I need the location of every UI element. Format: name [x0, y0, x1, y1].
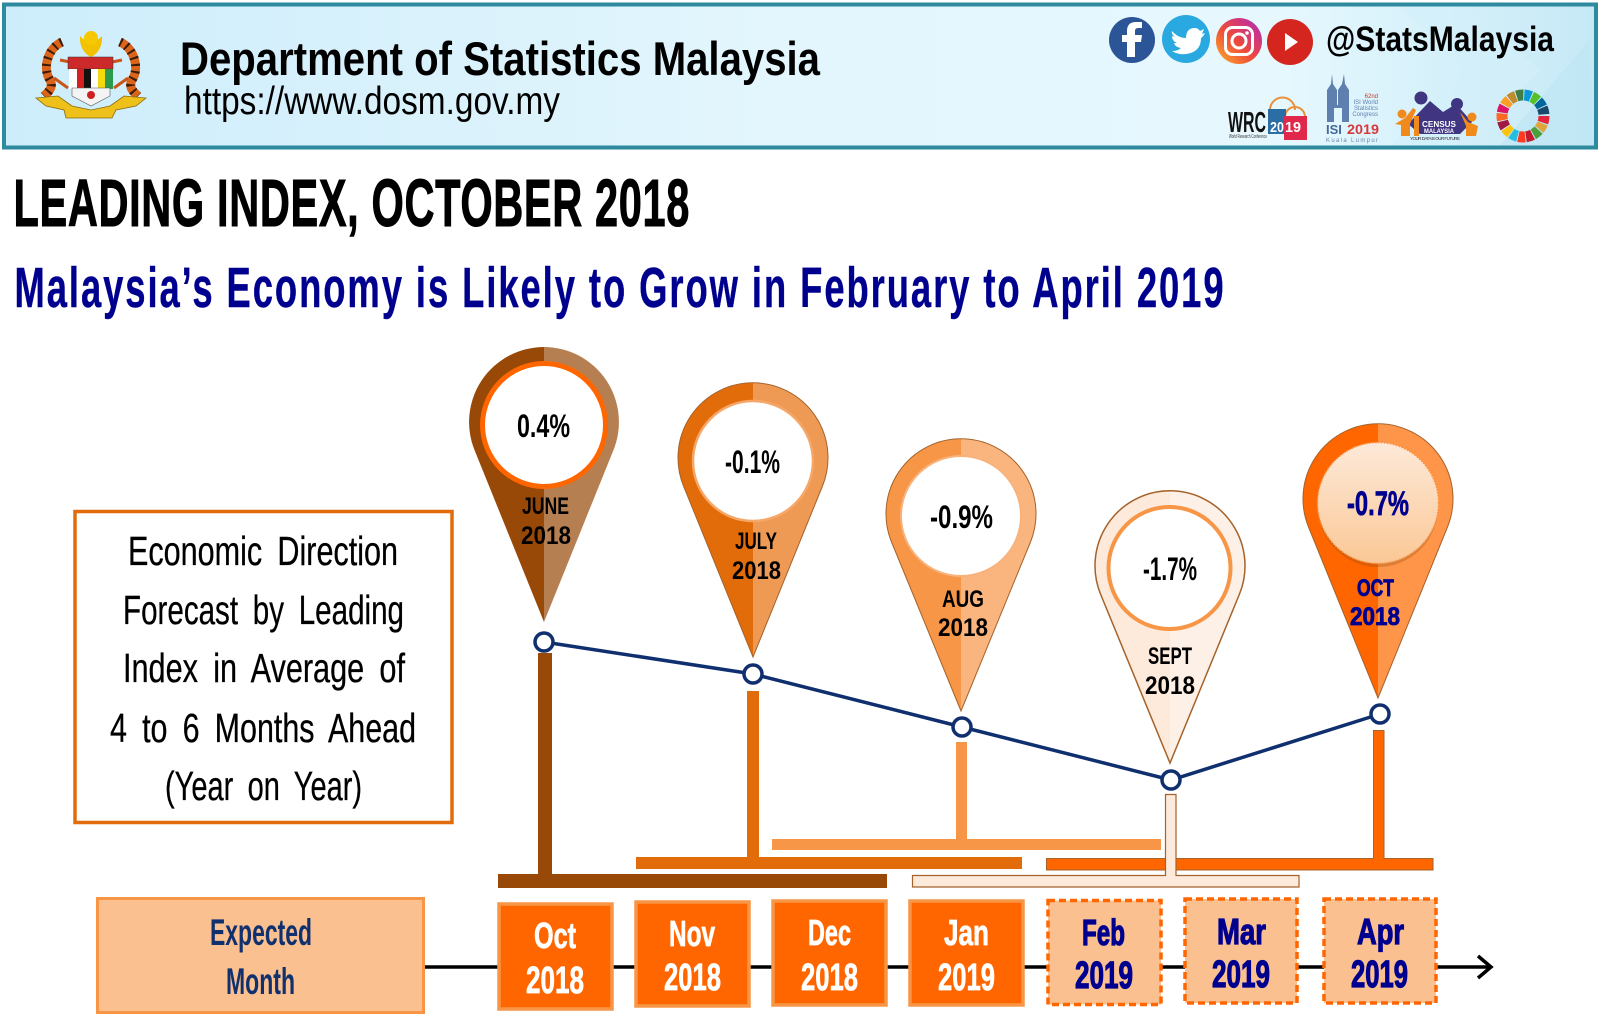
pin: September 2018 -1.7%: -1.7% [1143, 551, 1197, 587]
month box: Dec 2018 [773, 901, 886, 1005]
logo: ISI 2019 congress: Statistics [1354, 106, 1378, 112]
month box: Apr 2019 forecast: Apr [1357, 911, 1404, 952]
logo: ISI 2019 congress: Kuala Lumpur [1326, 138, 1378, 144]
month box: Oct 2018: Oct [534, 915, 576, 956]
logo: ISI 2019 congress: 62nd [1365, 94, 1378, 100]
logo: ISI 2019 congress [1326, 74, 1379, 144]
label: expected month [98, 898, 424, 1012]
panel: economic direction description: Index in Average of [123, 645, 405, 691]
pin: August 2018 -0.9% [886, 439, 1036, 711]
month box: Oct 2018: 2018 [526, 960, 584, 1002]
panel: economic direction description: Economic Direction [128, 528, 398, 574]
month box: Apr 2019 forecast: 2019 [1351, 954, 1408, 996]
label: expected month: Expected [210, 912, 312, 953]
panel: economic direction description: (Year on Year) [165, 763, 362, 809]
month box: Feb 2019 forecast: 2019 [1075, 955, 1133, 997]
logo: ISI 2019 congress: ISI [1326, 122, 1342, 137]
logo: census 2020: YOUR DATA IS OUR FUTURE [1410, 136, 1460, 141]
logo: WRC 2019: WRC [1228, 107, 1266, 139]
logo: WRC 2019: 19 [1285, 119, 1301, 136]
pin: October 2018 -0.7% [1303, 424, 1453, 698]
pin: August 2018 -0.9%: 2018 [938, 614, 988, 642]
pin: June 2018 0.4%: JUNE [522, 493, 569, 520]
pin: October 2018 -0.7%: -0.7% [1347, 485, 1409, 523]
logo: ISI 2019 congress: ISI World [1353, 100, 1378, 106]
logo: WRC 2019: World Research Conference [1229, 134, 1267, 140]
month box: Mar 2019 forecast: Mar [1217, 911, 1266, 952]
logo: WRC 2019: 20 [1270, 119, 1284, 136]
pin: July 2018 -0.1%: -0.1% [725, 444, 780, 480]
text: website address: https://www.dosm.gov.my [184, 80, 560, 123]
pin: June 2018 0.4%: 0.4% [517, 408, 570, 444]
icon: twitter [1162, 15, 1210, 63]
logo: ISI 2019 congress: Congress [1352, 112, 1378, 118]
pin: October 2018 -0.7%: 2018 [1350, 603, 1400, 631]
month box: Nov 2018: Nov [669, 913, 715, 954]
pin: October 2018 -0.7%: OCT [1357, 575, 1394, 602]
stem and bracket: July [636, 691, 1022, 869]
title: LEADING INDEX, OCTOBER 2018 [14, 166, 690, 241]
month box: Oct 2018 [499, 904, 612, 1009]
pin: August 2018 -0.9%: -0.9% [930, 499, 993, 535]
month box: Dec 2018: Dec [808, 912, 851, 953]
pin: July 2018 -0.1%: JULY [735, 528, 777, 555]
month box: Nov 2018: 2018 [664, 957, 721, 999]
pin: June 2018 0.4% [469, 347, 619, 622]
icon: facebook [1109, 17, 1155, 63]
stem and bracket: June [498, 653, 887, 888]
pin: August 2018 -0.9%: AUG [942, 586, 984, 613]
stem and bracket: September [912, 794, 1299, 887]
icon: instagram [1216, 18, 1262, 64]
month box: Feb 2019 forecast: Feb [1082, 912, 1125, 953]
pin: September 2018 -1.7%: SEPT [1148, 643, 1192, 670]
logo: census 2020: MALAYSIA [1424, 129, 1455, 135]
pin: September 2018 -1.7%: 2018 [1145, 672, 1195, 700]
month box: Dec 2018: 2018 [801, 957, 858, 999]
month box: Jan 2019: 2019 [938, 957, 995, 999]
panel: economic direction description: 4 to 6 Months Ahead [110, 705, 416, 751]
month box: Jan 2019: Jan [944, 912, 989, 953]
timeline arrow [425, 956, 1491, 978]
panel: economic direction description [75, 512, 452, 822]
icon: Malaysia coat of arms [36, 31, 146, 118]
icon: youtube [1267, 19, 1313, 65]
header banner [4, 4, 1596, 148]
pin: June 2018 0.4%: 2018 [521, 522, 571, 550]
logo: ISI 2019 congress: 2019 [1347, 121, 1379, 137]
logo: census 2020 [1395, 92, 1478, 141]
month box: Feb 2019 forecast [1048, 900, 1161, 1004]
month box: Nov 2018 [636, 902, 749, 1006]
month box: Mar 2019 forecast: 2019 [1212, 954, 1270, 996]
heading: department name: Department of Statistics Malaysia [180, 32, 821, 85]
month box: Jan 2019 [910, 901, 1023, 1005]
line chart: leading index trend [535, 633, 1389, 789]
logo: WRC 2019 [1228, 98, 1307, 140]
pin: September 2018 -1.7% [1095, 491, 1245, 763]
stem and bracket: August [772, 742, 1161, 850]
pin: July 2018 -0.1%: 2018 [732, 557, 781, 585]
stem and bracket: October [1046, 730, 1433, 870]
brackets and stems [498, 653, 1433, 888]
month box: Apr 2019 forecast [1324, 899, 1436, 1003]
panel: economic direction description: Forecast by Leading [123, 587, 404, 633]
label: expected month: Month [226, 961, 295, 1002]
month box: Mar 2019 forecast [1185, 899, 1297, 1003]
logo: census 2020: CENSUS [1422, 120, 1457, 129]
text: social handle: @StatsMalaysia [1326, 20, 1554, 59]
pin: July 2018 -0.1% [678, 383, 828, 657]
logo: sustainable development goals wheel [1502, 95, 1544, 137]
